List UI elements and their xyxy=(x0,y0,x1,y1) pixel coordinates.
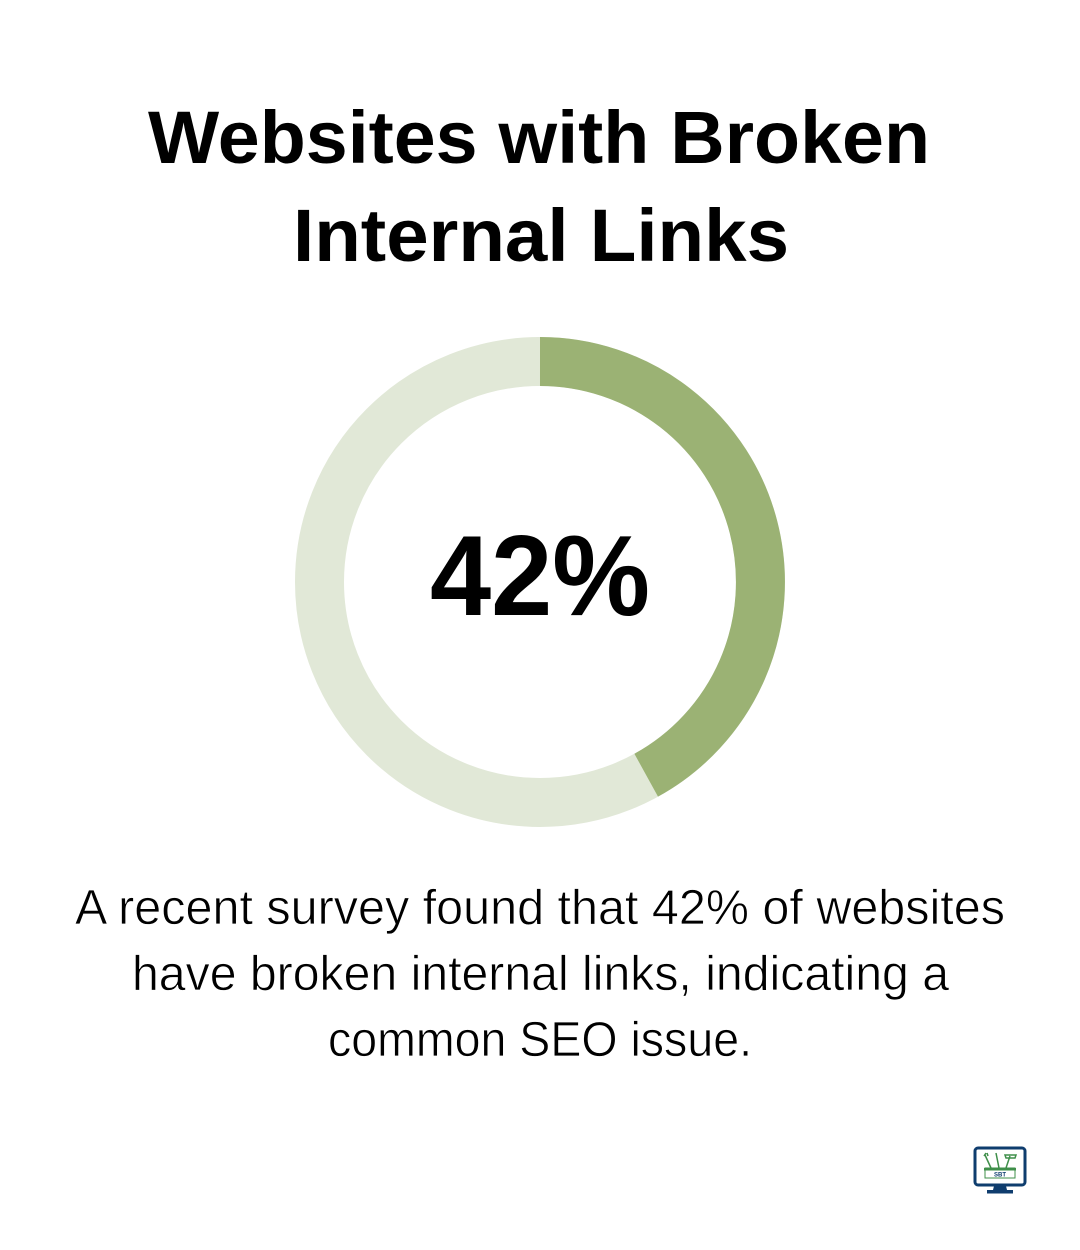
donut value: 42% xyxy=(430,513,650,640)
description text xyxy=(75,881,1005,1067)
description text: have broken internal links, indicating a xyxy=(132,947,950,1001)
description text: A recent survey found that 42% of websites xyxy=(75,881,1005,935)
icon: monitor logo with toolbox xyxy=(975,1148,1025,1194)
description text: common SEO issue. xyxy=(328,1013,752,1067)
title xyxy=(148,96,930,277)
title: Internal Links xyxy=(293,194,789,277)
title: Websites with Broken xyxy=(148,96,930,179)
icon: monitor logo with toolbox: SBT xyxy=(994,1172,1006,1178)
donut chart: 42% xyxy=(320,362,760,802)
